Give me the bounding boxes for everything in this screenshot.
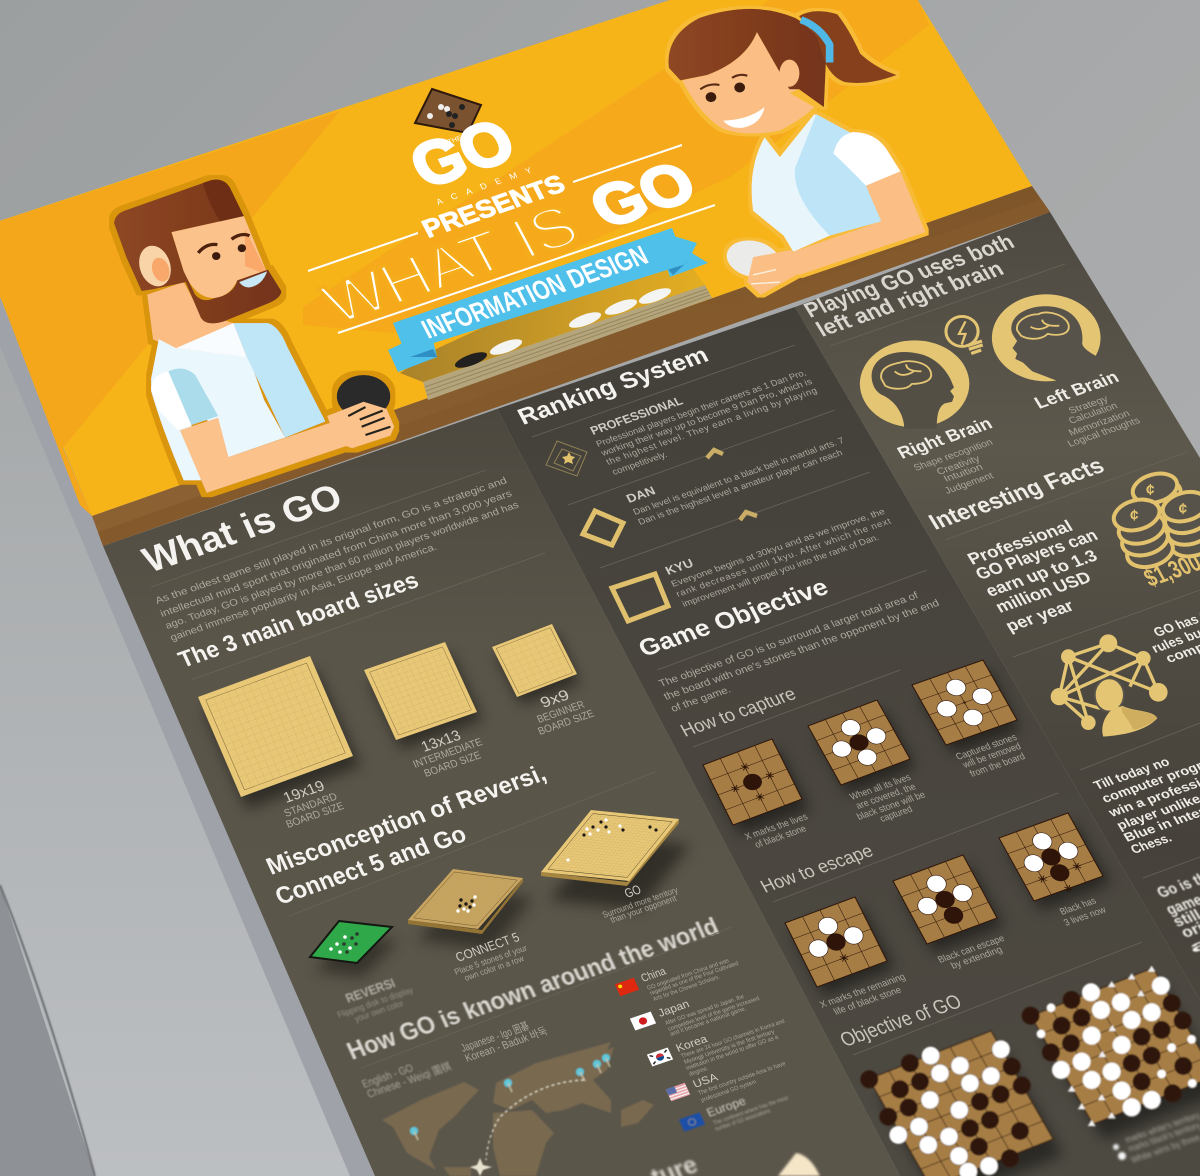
heading: ranking system: Ranking System bbox=[513, 342, 713, 430]
arrow: up to dan bbox=[740, 512, 757, 520]
heading: misconception bbox=[262, 760, 550, 910]
paragraph: intro: gained immense popularity in Asia, Europe and America. bbox=[169, 542, 439, 644]
poster page edge bbox=[0, 296, 375, 1176]
section: objective of go bbox=[836, 942, 1200, 1176]
rank: kyu: KYU bbox=[663, 556, 696, 578]
names of go by language bbox=[360, 1019, 550, 1101]
captions: capture: X marks the lives bbox=[743, 812, 810, 843]
labels: board sizes: BOARD SIZE bbox=[536, 708, 596, 738]
panel: brain and facts column background bbox=[795, 212, 1200, 1000]
arrow: up to professional bbox=[707, 450, 723, 458]
fact: player earnings: earn up to 1.3 bbox=[982, 546, 1101, 600]
rank: professional: competitively. bbox=[610, 450, 669, 477]
section: ranking system bbox=[513, 342, 893, 621]
board: 19x19 bbox=[198, 656, 361, 810]
logo: go board bbox=[415, 89, 481, 133]
partial illustration at bottom bbox=[778, 1153, 820, 1176]
section: interesting facts bbox=[924, 452, 1200, 956]
captions: capture: captured bbox=[878, 804, 915, 825]
labels: right brain bbox=[893, 413, 996, 496]
labels: board sizes: 9x9 bbox=[538, 687, 572, 712]
icon: coin stacks: ¢ bbox=[1130, 508, 1139, 525]
fact: player earnings: GO Players can bbox=[972, 526, 1101, 583]
captions: escape: Black can escape bbox=[936, 934, 1007, 966]
logo text: the go academy: ACADEMY bbox=[434, 165, 534, 207]
fact: player earnings: million USD bbox=[992, 568, 1095, 616]
rank: professional: Professional players begin their careers as 1 Dan Pro, bbox=[594, 368, 808, 449]
labels: board sizes: BOARD SIZE bbox=[284, 800, 346, 831]
country: europe: number of GO associations bbox=[714, 1108, 772, 1133]
panel: ranking and objective column background bbox=[497, 307, 1200, 1176]
ribbon: information design: INFORMATION DESIGN bbox=[417, 240, 653, 345]
country: europe bbox=[679, 1094, 790, 1133]
country: china: GO originated from China and was bbox=[646, 957, 730, 992]
fact: player earnings bbox=[964, 516, 1101, 635]
board: territory left bbox=[860, 1031, 1063, 1176]
heading: how to escape: How to escape bbox=[757, 841, 877, 897]
labels: board sizes: BOARD SIZE bbox=[422, 750, 483, 780]
captions: escape: life of black stone bbox=[832, 985, 904, 1018]
world map bbox=[382, 1042, 654, 1176]
board: escape step 3 bbox=[999, 813, 1111, 911]
country: usa: professional GO system bbox=[700, 1079, 758, 1104]
labels: game comparison: Flipping disk to display bbox=[336, 985, 415, 1020]
fact: computer programs bbox=[1091, 752, 1200, 856]
rank: kyu: improvement will propel you into the rank of Dan. bbox=[680, 532, 881, 609]
labels: left brain bbox=[1030, 367, 1142, 449]
rank: kyu: rank decreases until 1kyu. After which the next bbox=[674, 516, 893, 599]
rank: dan: DAN bbox=[624, 484, 658, 506]
country: japan bbox=[630, 993, 761, 1038]
country: usa bbox=[666, 1060, 787, 1104]
paragraph: intro: As the oldest game still played in its original form, GO is a strategic and bbox=[154, 476, 509, 607]
names of go by language: Japanese - Igo 囲碁 bbox=[459, 1019, 532, 1055]
panel: header bbox=[0, 0, 1032, 516]
captions: capture: will be removed bbox=[960, 742, 1023, 771]
labels: left brain: Calculation bbox=[1067, 401, 1120, 426]
captions: escape bbox=[818, 896, 1109, 1018]
heading: the 3 main board sizes: The 3 main board sizes bbox=[175, 567, 423, 673]
text: what is: WHAT IS bbox=[312, 192, 589, 336]
country: korea: Myongji University is the first tertiary bbox=[683, 1028, 776, 1066]
text: presents: PRESENTS bbox=[417, 169, 570, 243]
board: escape step 1 bbox=[785, 897, 895, 997]
rank: kyu bbox=[612, 507, 893, 621]
header table band bbox=[92, 186, 1050, 546]
section: misconception bbox=[262, 760, 690, 1024]
rank: professional: working their way up to become 9 Dan Pro, which is bbox=[598, 376, 814, 458]
icon: dan diamond bbox=[583, 511, 623, 545]
heading: objective of go: Objective of GO bbox=[836, 990, 965, 1051]
board: 13x13 bbox=[364, 642, 483, 750]
labels: board sizes: INTERMEDIATE bbox=[411, 737, 484, 771]
heading: what is go: What is GO bbox=[136, 476, 348, 580]
labels: right brain: Judgement bbox=[943, 471, 996, 496]
country: japan: competitive level of the game increased bbox=[667, 995, 761, 1033]
rank: dan bbox=[583, 436, 846, 545]
labels: right brain: Creativity bbox=[935, 454, 983, 477]
fact: oldest game bbox=[1154, 857, 1200, 956]
country: korea: There are 24 hour GO channels in Korea and bbox=[680, 1018, 786, 1060]
heading: how to capture: How to capture bbox=[677, 684, 800, 741]
country: korea: Korea bbox=[674, 1033, 710, 1055]
rank: professional bbox=[546, 368, 819, 477]
captions: escape: by extending bbox=[949, 945, 1005, 972]
icon: coin stacks: ¢ bbox=[1179, 501, 1188, 518]
section: how go is known around the world bbox=[342, 911, 790, 1176]
country: china bbox=[615, 957, 740, 1003]
heading: around the world: How GO is known around the world bbox=[342, 911, 723, 1065]
country: korea: degree. bbox=[688, 1065, 710, 1078]
heading: game objective: Game Objective bbox=[634, 574, 833, 662]
country: china: China bbox=[639, 965, 668, 985]
fact: player earnings: per year bbox=[1002, 596, 1077, 635]
section: how to escape bbox=[757, 793, 1111, 1018]
country: usa: USA bbox=[691, 1071, 720, 1091]
icon: kyu square bbox=[612, 574, 668, 621]
country: europe: The continent where has the most bbox=[712, 1095, 790, 1127]
board: reversi perspective bbox=[310, 921, 398, 977]
captions: capture: from the board bbox=[968, 752, 1028, 780]
board: territory right bbox=[1022, 966, 1200, 1140]
section: how to capture bbox=[677, 660, 1028, 851]
heading: playing go uses both: Playing GO uses both bbox=[799, 229, 1019, 322]
country: usa: The first country outside Asia to have bbox=[697, 1060, 787, 1097]
board: escape step 2 bbox=[893, 855, 1004, 954]
legend: territory bbox=[1113, 1111, 1200, 1166]
fact: simple rules bbox=[1148, 603, 1200, 665]
labels: game comparison: Place 5 stones of your bbox=[453, 943, 529, 977]
board: go perspective bbox=[541, 810, 690, 910]
captions: escape: 3 lives now bbox=[1062, 905, 1109, 929]
captions: capture: black stone will be bbox=[855, 790, 928, 823]
rank: professional: PROFESSIONAL bbox=[588, 394, 685, 438]
board: 9x9 bbox=[492, 624, 580, 705]
board: connect 5 perspective bbox=[408, 869, 533, 950]
country: korea: institution in the world to offer GO as a bbox=[685, 1034, 780, 1072]
panel: what is go column background bbox=[103, 409, 900, 1176]
labels: game comparison: Surround more territory bbox=[601, 885, 680, 920]
fact: computer programs: Till today no bbox=[1091, 755, 1172, 792]
character: woman holding white stone bbox=[669, 9, 925, 295]
section: left and right brain bbox=[799, 229, 1142, 496]
country: japan: and it became a national game. bbox=[669, 1005, 748, 1038]
captions: capture: Captured stones bbox=[954, 733, 1019, 763]
captions: capture: of black stone bbox=[753, 824, 809, 851]
country: china: regarded as one of the Four Cultivated bbox=[649, 960, 740, 997]
character: man holding black stone bbox=[114, 180, 394, 493]
captions: escape: Black has bbox=[1058, 896, 1098, 918]
rank: dan: Dan level is equivalent to a black belt in martial arts. 7 bbox=[631, 436, 846, 517]
go board on table bbox=[400, 240, 712, 400]
paragraph: intro: intellectual mind sport that originated from China more than 3,000 years bbox=[159, 489, 514, 620]
labels: left brain: Strategy bbox=[1067, 394, 1111, 416]
icon: light bulb bbox=[946, 316, 983, 354]
country: china: Arts for the Chinese Scholars. bbox=[652, 974, 721, 1003]
labels: left brain: Left Brain bbox=[1030, 367, 1122, 412]
country: japan: After GO was spread to Japan, the bbox=[664, 993, 746, 1027]
labels: board sizes: BEGINNER bbox=[535, 699, 587, 726]
title block bbox=[308, 106, 715, 336]
labels: game comparison: REVERSI bbox=[343, 976, 397, 1006]
rank: kyu: Everyone begins at 30kyu and as we improve, the bbox=[669, 507, 887, 589]
labels: right brain: Intuition bbox=[942, 462, 985, 484]
fact: player earnings: Professional bbox=[964, 516, 1076, 568]
labels: game comparison: own color in a row bbox=[463, 954, 526, 983]
fact: computer programs: Chess. bbox=[1128, 831, 1174, 856]
labels: right brain: Shape recognition bbox=[912, 438, 995, 473]
section: game objective bbox=[634, 570, 941, 715]
section: what is go bbox=[136, 470, 521, 644]
labels: left brain: Memorization bbox=[1067, 409, 1132, 438]
icon: coin stacks: ¢ bbox=[1146, 482, 1155, 499]
paragraph: objective: of the game. bbox=[669, 684, 733, 715]
labels: game comparison: GO bbox=[622, 882, 643, 901]
labels: board sizes: 13x13 bbox=[419, 728, 463, 756]
names of go by language: Chinese - Weiqi 圍棋 bbox=[365, 1059, 454, 1101]
country: korea bbox=[647, 1018, 786, 1078]
captions: capture: are covered, the bbox=[854, 782, 918, 812]
icon: professional diamond with star bbox=[546, 441, 587, 476]
logo text: the go academy: THE bbox=[447, 135, 464, 146]
paragraph: objective: The objective of GO is to surround a larger total area of bbox=[657, 590, 920, 690]
labels: right brain: Right Brain bbox=[893, 413, 996, 462]
icon: left brain head bbox=[992, 294, 1105, 387]
board: capture step 3 bbox=[912, 660, 1020, 755]
names of go by language: Korean - Baduk 바둑 bbox=[463, 1025, 550, 1065]
labels: game comparison: CONNECT 5 bbox=[453, 930, 522, 965]
captions: capture: When all its lives bbox=[848, 773, 913, 803]
labels: board sizes: 19x19 bbox=[281, 778, 327, 807]
labels: game comparison bbox=[336, 882, 680, 1024]
logo text: the go academy: GO bbox=[399, 106, 526, 201]
flags and country notes bbox=[615, 957, 790, 1133]
heading: playing go uses both: left and right brain bbox=[811, 256, 1008, 341]
labels: game comparison: than your opponent bbox=[609, 893, 678, 925]
section: board sizes bbox=[175, 553, 596, 831]
heading: interesting facts: Interesting Facts bbox=[924, 453, 1109, 535]
labels: board sizes bbox=[281, 687, 596, 831]
country: japan: Japan bbox=[656, 998, 691, 1020]
labels: game comparison: your own color bbox=[353, 998, 405, 1024]
icon: coin stacks bbox=[1110, 469, 1200, 572]
captions: capture bbox=[743, 733, 1028, 851]
board: capture step 1 bbox=[703, 739, 810, 835]
title rules bbox=[308, 145, 715, 333]
captions: escape: X marks the remaining bbox=[818, 972, 908, 1011]
board: capture step 2 bbox=[808, 700, 916, 795]
heading: misconception: Misconception of Reversi, bbox=[262, 760, 550, 880]
labels: left brain: Logical thoughts bbox=[1066, 416, 1142, 449]
rank: professional: the highest level. They earn a living by playing bbox=[604, 386, 819, 467]
ribbon: information design bbox=[388, 228, 708, 372]
country: europe: Europe bbox=[705, 1094, 748, 1120]
labels: board sizes: STANDARD bbox=[282, 791, 339, 820]
text: go: GO bbox=[578, 149, 707, 241]
heading: misconception: Connect 5 and Go bbox=[271, 821, 470, 910]
paragraph: intro bbox=[154, 476, 521, 644]
icon: network and person bbox=[1051, 634, 1168, 737]
names of go by language: English - GO bbox=[360, 1062, 415, 1091]
rank: dan: Dan is the highest level a amateur player can reach bbox=[636, 448, 844, 527]
icon: right brain head bbox=[860, 340, 969, 429]
paragraph: objective: the board with one's stones than the opponent by the end bbox=[662, 597, 941, 703]
paragraph: intro: ago. Today, GO is played by more than 60 million players worldwide and has bbox=[164, 500, 521, 632]
